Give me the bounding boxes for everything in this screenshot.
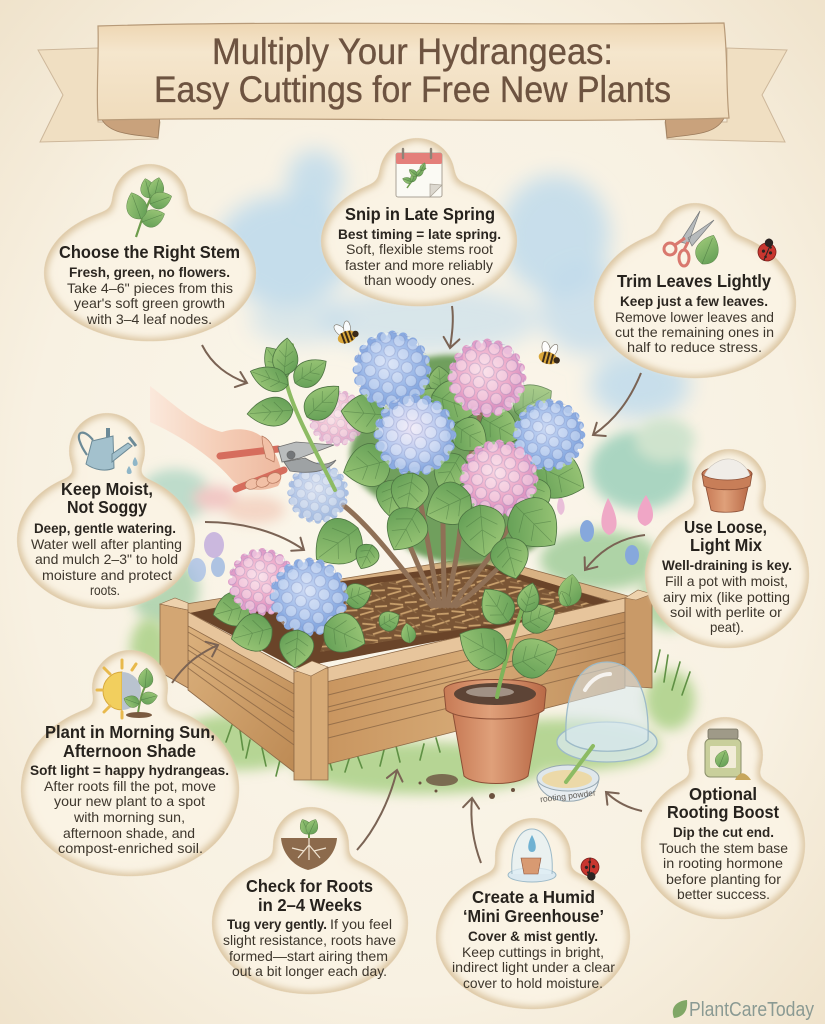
body text: Keep cuttings in bright, (462, 944, 604, 960)
body text (338, 226, 501, 288)
front corner post (294, 661, 328, 780)
hand holding pruners and cutting (150, 337, 349, 491)
body text: Well-draining is key. (662, 557, 792, 573)
soil and mulch (190, 563, 625, 668)
raised wooden bed (160, 556, 652, 780)
heading (61, 479, 153, 517)
grass wash (130, 618, 695, 794)
rooting powder dish (537, 746, 599, 804)
body text: better success. (677, 886, 770, 902)
main hydrangea shrub (288, 332, 594, 606)
body text: Keep just a few leaves. (620, 293, 768, 309)
body text (659, 824, 788, 902)
right ribbon tail (665, 48, 787, 142)
body text: roots. (90, 582, 120, 598)
body text: cut the remaining ones in (615, 324, 774, 340)
left ribbon tail (38, 48, 160, 142)
heading: Trim Leaves Lightly (617, 271, 771, 291)
heading: Create a Humid (472, 887, 595, 907)
rooting powder dish: rooting powder (539, 787, 596, 804)
left side panel (188, 612, 294, 772)
heading: Not Soggy (67, 497, 147, 517)
body text (223, 916, 396, 979)
title text: Multiply Your Hydrangeas: (212, 31, 613, 72)
fingers (244, 436, 282, 491)
title ribbon banner (38, 23, 787, 142)
ribbon body (97, 23, 729, 120)
pruner blades (278, 442, 336, 472)
heading (45, 722, 215, 761)
icon: green stem (122, 176, 174, 237)
arrow: loose mix (585, 535, 645, 570)
arrow: rooting boost (606, 792, 642, 811)
panel: snip in late spring (321, 138, 517, 306)
body text: Fill a pot with moist, (665, 573, 788, 589)
body text: cover to hold moisture. (463, 975, 603, 991)
back leaves (413, 365, 561, 428)
heading (684, 517, 767, 555)
body text: Take 4–6" pieces from this (67, 280, 233, 296)
shrub leaves behind blooms (338, 375, 594, 521)
body text: slight resistance, roots have (223, 932, 396, 948)
title text (154, 31, 671, 110)
flower heads (354, 332, 584, 517)
icon: watering can (79, 428, 138, 474)
heading: Choose the Right Stem (59, 242, 240, 262)
panel: morning sun afternoon shade (21, 650, 239, 876)
watercolor sky (215, 150, 690, 419)
background garden foliage (131, 418, 700, 630)
body text (31, 520, 182, 598)
body text: Cover & mist gently. (468, 928, 598, 944)
body text: Water well after planting (31, 536, 182, 552)
shrub leaves in front (302, 470, 572, 583)
body text: year's soft green growth (74, 295, 225, 311)
panel: optional rooting boost (641, 717, 805, 919)
icon: half sun and seedling (97, 660, 159, 718)
body text: than woody ones. (364, 272, 475, 288)
heading: Use Loose, (684, 517, 767, 537)
arm and hand (150, 386, 281, 490)
heading: ‘Mini Greenhouse’ (463, 906, 604, 926)
pruner handles (220, 449, 284, 489)
icon: hormone jar (705, 729, 751, 780)
body text: If you feel (330, 916, 392, 932)
panel: use loose light mix (645, 449, 809, 648)
body text: moisture and protect (42, 567, 172, 583)
arrow: snip timing (450, 306, 453, 348)
left corner post (160, 598, 188, 688)
foliage mass (350, 355, 550, 564)
icon: ladybug (754, 237, 779, 264)
body text: faster and more reliably (345, 257, 493, 273)
body text: Tug very gently. (227, 916, 327, 932)
arrow: morning sun (172, 645, 218, 683)
heading: Rooting Boost (667, 802, 779, 822)
body text (30, 762, 229, 856)
body text: half to reduce stress. (627, 339, 762, 355)
body text: formed—start airing them (229, 948, 388, 964)
body text: Fresh, green, no flowers. (69, 264, 230, 280)
heading: Snip in Late Spring (345, 204, 495, 224)
body text: After roots fill the pot, move (44, 778, 216, 794)
icon: mini dome with droplet (508, 829, 556, 882)
heading: Keep Moist, (61, 479, 153, 499)
body text: with 3–4 leaf nodes. (86, 311, 212, 327)
heading (667, 784, 779, 822)
body text: with morning sun, (73, 809, 185, 825)
body text: before planting for (666, 871, 781, 887)
body text: compost-enriched soil. (58, 840, 203, 856)
potted cutting (450, 580, 564, 697)
body text (662, 557, 792, 635)
panel: mini greenhouse (436, 818, 630, 1009)
body text (615, 293, 774, 355)
cutting stem (246, 337, 349, 490)
body text: Touch the stem base (659, 840, 788, 856)
panel: check for roots (212, 807, 408, 994)
body text: afternoon shade, and (63, 825, 195, 841)
body text: airy mix (like potting (663, 589, 790, 605)
heading: in 2–4 Weeks (258, 895, 362, 915)
arrow: mini greenhouse (471, 798, 481, 863)
body text: peat). (710, 619, 744, 635)
bees (331, 317, 564, 367)
body text: out a bit longer each day. (232, 963, 387, 979)
body text: Dip the cut end. (673, 824, 774, 840)
glass dome (557, 662, 657, 762)
body text: indirect light under a clear (452, 959, 615, 975)
icon: roots in soil (281, 817, 337, 870)
body text: Deep, gentle watering. (34, 520, 176, 536)
back rim of bed (186, 556, 628, 614)
icon: scissors and leaf (664, 211, 724, 268)
heading: Light Mix (690, 535, 762, 555)
body text (452, 928, 615, 991)
icon: ladybug (577, 854, 605, 882)
heading: Plant in Morning Sun, (45, 722, 215, 742)
heading: Afternoon Shade (63, 741, 196, 761)
front side panel (326, 598, 625, 764)
scattered soil crumbs (418, 774, 515, 799)
body text (67, 264, 233, 327)
faded back flower heads (288, 391, 364, 523)
body text: soil with perlite or (670, 604, 782, 620)
body text: Remove lower leaves and (615, 309, 774, 325)
icon: calendar (396, 149, 442, 197)
arrow: choose stem (202, 345, 247, 383)
arrow: keep moist (205, 522, 304, 550)
heading: Check for Roots (246, 876, 373, 896)
seedlings in the bed (375, 573, 584, 644)
body text: your new plant to a spot (54, 793, 205, 809)
icon: pot of light mix (702, 459, 752, 512)
panel: choose the right stem (44, 164, 256, 341)
body text: in rooting hormone (663, 855, 783, 871)
body text: Best timing = late spring. (338, 226, 501, 242)
heading: Optional (689, 784, 757, 804)
body text: Soft light = happy hydrangeas. (30, 762, 229, 778)
shrub stems (343, 400, 528, 606)
title text: Easy Cuttings for Free New Plants (154, 69, 671, 110)
body text: and mulch 2–3" to hold (35, 551, 178, 567)
right corner post (625, 590, 652, 688)
panel: keep moist (17, 413, 195, 609)
small front hydrangea (209, 549, 376, 669)
heading (463, 887, 604, 926)
panel: trim leaves lightly (594, 203, 796, 378)
arrow: trim leaves (593, 373, 641, 435)
arrow: check roots (357, 770, 397, 850)
terracotta pot with cutting (444, 580, 564, 784)
body text: Soft, flexible stems root (346, 241, 493, 257)
heading (246, 876, 373, 915)
